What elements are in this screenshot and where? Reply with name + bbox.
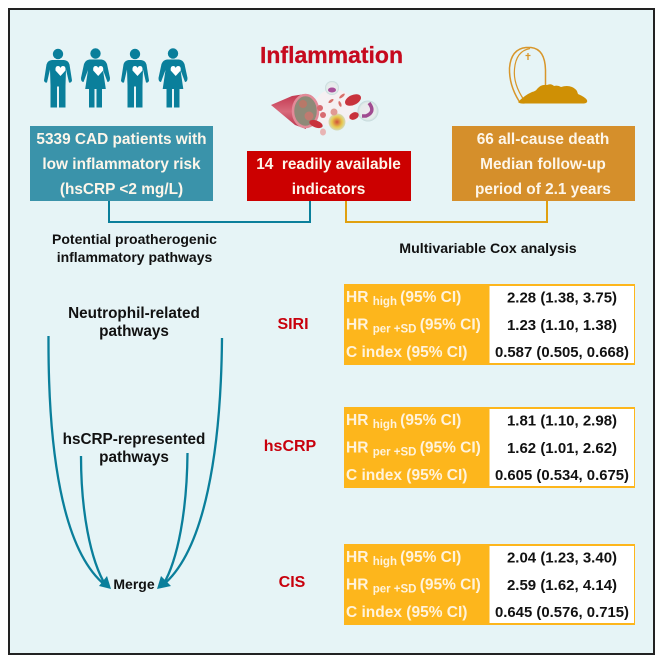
panel: outcomes: Median follow-up bbox=[480, 156, 606, 173]
icon: blood vessel and cells bbox=[271, 81, 378, 136]
table: SIRI: (95% CI) bbox=[420, 316, 481, 334]
table: CIS: 0.645 (0.576, 0.715) bbox=[495, 604, 629, 621]
table: CIS: (95% CI) bbox=[400, 549, 461, 566]
table: SIRI: per +SD bbox=[373, 324, 420, 336]
panel: patients: (hsCRP <2 mg/L) bbox=[60, 181, 183, 198]
table: hsCRP: HR bbox=[346, 412, 368, 429]
label: hsCRP pathways: hsCRP-represented bbox=[63, 431, 205, 448]
table: hsCRP: (95% CI) bbox=[420, 440, 481, 456]
table: CIS: 2.59 (1.62, 4.14) bbox=[507, 577, 617, 594]
panel: patients: 5339 CAD patients with bbox=[36, 131, 207, 148]
table: hsCRP: C index (95% CI) bbox=[346, 467, 467, 484]
table: hsCRP: HR bbox=[346, 440, 368, 456]
table: SIRI: HR bbox=[346, 316, 368, 334]
table: SIRI: HR bbox=[346, 289, 368, 306]
table: CIS: HR bbox=[346, 576, 368, 594]
table: SIRI bbox=[344, 284, 635, 365]
label: neutrophil pathways: Neutrophil-related bbox=[68, 305, 200, 322]
table: hsCRP: high bbox=[373, 419, 400, 431]
panel: indicators bbox=[247, 151, 411, 201]
label: SIRI: SIRI bbox=[277, 316, 309, 333]
table: SIRI: 2.28 (1.38, 3.75) bbox=[507, 290, 617, 306]
label: hsCRP: hsCRP bbox=[264, 438, 317, 455]
panel: outcomes bbox=[452, 126, 635, 201]
table: SIRI: (95% CI) bbox=[400, 289, 461, 306]
icon: patients bbox=[44, 48, 188, 108]
panel: patients: low inflammatory risk bbox=[42, 156, 201, 173]
icon: gravestone bbox=[509, 48, 587, 104]
label: hsCRP pathways: pathways bbox=[99, 449, 169, 466]
panel: outcomes: period of 2.1 years bbox=[475, 181, 611, 198]
panel: patients bbox=[30, 126, 213, 201]
title: Inflammation: Inflammation bbox=[260, 42, 403, 68]
label: Merge: Merge bbox=[113, 576, 155, 592]
table: CIS: high bbox=[373, 556, 400, 568]
table: SIRI: 0.587 (0.505, 0.668) bbox=[495, 344, 629, 361]
table: SIRI: high bbox=[373, 296, 400, 308]
table: CIS bbox=[344, 544, 635, 625]
heading: pathways bbox=[52, 231, 217, 265]
table: SIRI: 1.23 (1.10, 1.38) bbox=[507, 317, 617, 334]
table: hsCRP: per +SD bbox=[373, 446, 420, 458]
panel: indicators: 14 readily available bbox=[256, 156, 401, 173]
table: hsCRP: (95% CI) bbox=[400, 412, 461, 429]
connector: gold bbox=[346, 200, 547, 222]
heading: pathways: Potential proatherogenic bbox=[52, 231, 217, 247]
panel: outcomes: 66 all-cause death bbox=[477, 131, 609, 148]
table: CIS: (95% CI) bbox=[420, 576, 481, 594]
arrows: merge bbox=[48, 336, 222, 589]
label: neutrophil pathways bbox=[68, 305, 200, 340]
label: hsCRP pathways bbox=[63, 431, 205, 466]
table: hsCRP: 1.62 (1.01, 2.62) bbox=[507, 440, 617, 457]
connector: blue bbox=[109, 200, 310, 222]
table: hsCRP: 1.81 (1.10, 2.98) bbox=[507, 412, 617, 430]
table: hsCRP bbox=[344, 407, 635, 488]
table: CIS: 2.04 (1.23, 3.40) bbox=[507, 550, 617, 566]
heading: pathways: inflammatory pathways bbox=[57, 249, 213, 265]
label: neutrophil pathways: pathways bbox=[99, 323, 169, 340]
table: hsCRP: 0.605 (0.534, 0.675) bbox=[495, 467, 629, 484]
table: CIS: C index (95% CI) bbox=[346, 604, 467, 621]
heading: Cox analysis: Multivariable Cox analysis bbox=[399, 241, 577, 257]
table: CIS: HR bbox=[346, 549, 368, 566]
table: CIS: per +SD bbox=[373, 584, 420, 596]
panel: indicators: indicators bbox=[292, 181, 365, 198]
table: SIRI: C index (95% CI) bbox=[346, 344, 467, 361]
label: CIS: CIS bbox=[279, 574, 306, 591]
